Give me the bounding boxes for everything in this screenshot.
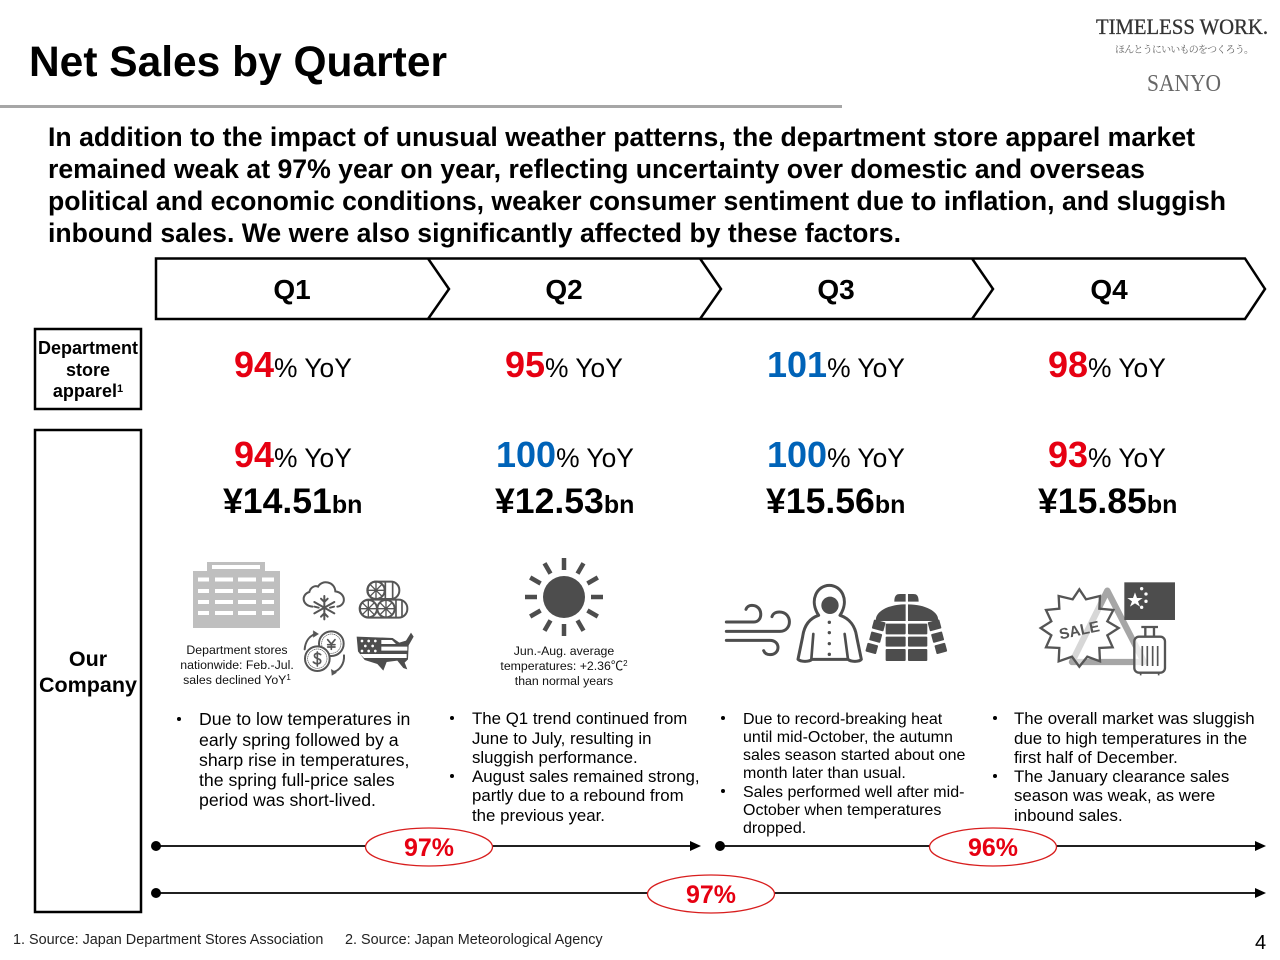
title: Net Sales by Quarter: [29, 38, 447, 86]
department store apparel YoY figures: 94% YoY: [234, 344, 352, 385]
Q1 commentary: early spring followed by a: [199, 730, 399, 750]
department store apparel YoY figures: 101% YoY: [767, 344, 905, 385]
Q3 commentary: dropped.: [743, 820, 806, 837]
Q1 commentary: Due to low temperatures in: [199, 709, 410, 729]
department store apparel YoY figures: [234, 344, 1166, 385]
department store apparel YoY figures: 95% YoY: [505, 344, 623, 385]
company YoY figures: [234, 434, 1166, 475]
Q1 commentary: [177, 709, 410, 810]
intro text block: In addition to the impact of unusual weather patterns, the department store apparel market: [48, 122, 1195, 152]
footnotes: [13, 932, 603, 948]
row label: department store apparel: store: [66, 360, 110, 380]
Q4 commentary: inbound sales.: [1014, 806, 1123, 825]
icon: department store building: [193, 562, 280, 628]
quarter chevrons: Q1: [273, 274, 311, 305]
full year arrow with 97%: 97%: [686, 881, 736, 909]
Q2 commentary: [450, 709, 700, 825]
icon: triangle with sale badge, China flag and suitcase: [1041, 582, 1175, 675]
Q4 commentary: first half of December.: [1014, 748, 1178, 767]
Q4 commentary: [993, 709, 1255, 825]
icon: triangle with sale badge, China flag and suitcase: SALE: [1058, 618, 1101, 643]
caption: temperatures: than normal years: [515, 674, 613, 688]
Q1 commentary: sharp rise in temperatures,: [199, 750, 409, 770]
first half arrow with 97%: [151, 828, 701, 866]
intro text block: remained weak at 97% year on year, reflecting uncertainty over domestic and overseas: [48, 154, 1145, 184]
company net sales figures: ¥15.56bn: [766, 481, 905, 521]
Q3 commentary: month later than usual.: [743, 765, 906, 782]
footnotes: 2. Source: Japan Meteorological Agency: [345, 932, 603, 948]
row label: our company: Company: [39, 673, 137, 697]
company net sales figures: ¥12.53bn: [495, 481, 634, 521]
icon: hooded coat: [798, 585, 861, 661]
first half arrow with 97%: 97%: [404, 834, 454, 862]
company YoY figures: 100% YoY: [496, 434, 634, 475]
logo: TIMELESS WORK.: [1096, 14, 1268, 39]
Q3 commentary: Due to record-breaking heat: [743, 711, 943, 728]
page number: 4: [1255, 932, 1266, 954]
caption: temperatures: Jun.-Aug. average: [514, 644, 614, 658]
footnotes: 1. Source: Japan Department Stores Association: [13, 932, 323, 948]
caption: department stores: nationwide: Feb.-Jul.: [180, 658, 294, 672]
icon: sun: [525, 558, 603, 636]
icon: puffer jacket: [865, 594, 947, 661]
Q2 commentary: The Q1 trend continued from: [472, 709, 687, 728]
quarter chevrons: Q3: [817, 274, 855, 305]
Q3 commentary: until mid-October, the autumn: [743, 729, 953, 746]
Q2 commentary: sluggish performance.: [472, 748, 638, 767]
caption: department stores: Department stores: [186, 643, 288, 657]
caption: temperatures: 2: [623, 659, 628, 668]
caption: temperatures: [500, 644, 628, 688]
Q1 commentary: period was short-lived.: [199, 790, 376, 810]
Q4 commentary: The January clearance sales: [1014, 767, 1229, 786]
icon: cloud with snowflake: [304, 582, 344, 619]
Q1 commentary: the spring full-price sales: [199, 770, 395, 790]
company YoY figures: 94% YoY: [234, 434, 352, 475]
second half arrow with 96%: 96%: [968, 834, 1018, 862]
icon: wind: [726, 605, 789, 655]
Q3 commentary: [721, 711, 965, 837]
caption: department stores: sales declined YoY: [183, 673, 286, 687]
logo: SANYO: [1147, 71, 1221, 97]
department store apparel YoY figures: 98% YoY: [1048, 344, 1166, 385]
row label: our company: [35, 430, 141, 912]
logo: [1096, 14, 1268, 97]
quarter chevrons: Q4: [1090, 274, 1128, 305]
Q2 commentary: August sales remained strong,: [472, 767, 700, 786]
second half arrow with 96%: [715, 828, 1266, 866]
Q4 commentary: due to high temperatures in the: [1014, 729, 1247, 748]
caption: department stores: 1: [286, 673, 291, 682]
intro text block: [48, 122, 1226, 248]
quarter chevrons: Q2: [545, 274, 583, 305]
row label: department store apparel: Department: [38, 338, 138, 358]
Q3 commentary: sales season started about one: [743, 747, 965, 764]
full year arrow with 97%: [151, 875, 1266, 913]
row label: department store apparel: apparel: [53, 381, 117, 401]
icon: currency exchange coins: [305, 631, 344, 675]
caption: temperatures: temperatures: +2.36℃: [500, 659, 623, 673]
intro text block: inbound sales. We were also significantly affected by these factors.: [48, 218, 901, 248]
logo: ほんとうにいいものをつくろう。: [1115, 41, 1254, 56]
row label: department store apparel: [35, 329, 141, 409]
company net sales figures: ¥15.85bn: [1038, 481, 1177, 521]
company net sales figures: [223, 481, 1177, 521]
Q4 commentary: season was weak, as were: [1014, 786, 1215, 805]
quarter chevrons: [156, 258, 1265, 319]
Q4 commentary: The overall market was sluggish: [1014, 709, 1255, 728]
icon: United States flag map: [357, 633, 414, 671]
row label: department store apparel: 1: [117, 383, 123, 395]
Q3 commentary: Sales performed well after mid-: [743, 784, 964, 801]
company YoY figures: 93% YoY: [1048, 434, 1166, 475]
caption: department stores: [180, 643, 294, 687]
row label: our company: Our: [69, 647, 108, 671]
Q2 commentary: the previous year.: [472, 806, 605, 825]
intro text block: political and economic conditions, weaker consumer sentiment due to inflation, and sluggish: [48, 186, 1226, 216]
company YoY figures: 100% YoY: [767, 434, 905, 475]
company net sales figures: ¥14.51bn: [223, 481, 362, 521]
Q3 commentary: October when temperatures: [743, 802, 941, 819]
Q2 commentary: partly due to a rebound from: [472, 786, 684, 805]
Q2 commentary: June to July, resulting in: [472, 729, 651, 748]
icon: stacked tires: [360, 582, 407, 618]
